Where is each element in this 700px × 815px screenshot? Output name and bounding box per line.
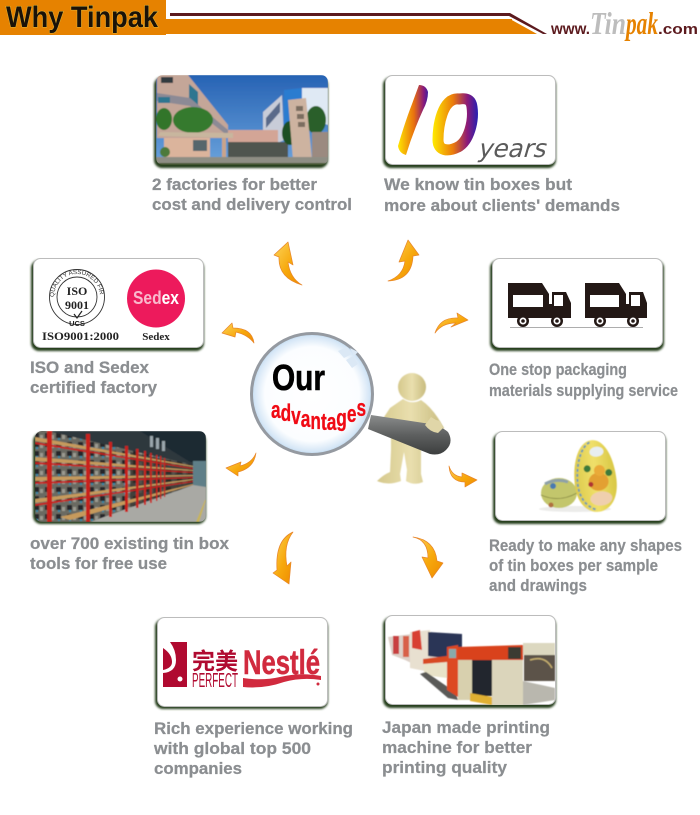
website logo — [550, 5, 698, 41]
figure holding magnifier — [252, 334, 451, 484]
caption: of tin boxes per sample — [489, 556, 658, 575]
icon: hand — [425, 417, 443, 433]
photo: printing machine — [388, 630, 555, 705]
icon: ISO 9001 seal: 9001 — [65, 298, 89, 312]
icon: delivery trucks — [508, 283, 647, 328]
icon: figure — [377, 373, 444, 484]
caption — [152, 175, 352, 214]
caption: and drawings — [489, 576, 587, 595]
website logo: Tin — [590, 5, 626, 41]
icon: magnifier handle — [368, 415, 451, 454]
icon: Perfect logo: 完美 — [192, 648, 238, 674]
arrow: to ISO — [222, 323, 254, 343]
caption — [153, 719, 353, 778]
caption: over 700 existing tin box — [30, 534, 230, 553]
icon: ISO 9001 seal: ISO — [67, 284, 87, 298]
caption: tools for free use — [30, 554, 167, 573]
arrow: to factories — [274, 242, 302, 285]
caption: One stop packaging — [489, 360, 627, 379]
icon: Nestle logo — [243, 644, 321, 687]
icon: ISO 9001 seal — [42, 269, 119, 343]
icon: Perfect logo — [163, 642, 238, 692]
caption: printing quality — [382, 758, 508, 777]
photo: factory buildings — [156, 75, 328, 165]
caption — [489, 536, 682, 595]
arrow: to clients — [273, 532, 293, 584]
caption: Japan made printing — [382, 718, 550, 737]
panel: trucks — [489, 258, 678, 400]
caption: certified factory — [30, 378, 158, 397]
magnifier lens — [252, 334, 372, 454]
caption — [384, 175, 620, 215]
caption: more about clients' demands — [384, 196, 620, 215]
arrow: to egg tins — [449, 466, 477, 487]
website logo: www. — [550, 21, 590, 38]
panel: tools warehouse — [30, 428, 230, 573]
text: Our: Our — [272, 357, 325, 398]
caption — [489, 360, 678, 400]
website logo: pak — [624, 5, 658, 41]
caption: machine for better — [382, 738, 532, 757]
icon: ISO 9001 seal: UCS — [69, 319, 85, 328]
caption: 2 factories for better — [152, 175, 317, 194]
panel: global clients — [153, 618, 353, 778]
icon: Nestle logo: Nestlé — [243, 644, 320, 682]
arrow: to printing — [413, 537, 443, 578]
caption: companies — [154, 759, 242, 778]
heading: Why Tinpak: Why Tinpak — [6, 1, 158, 34]
caption: Rich experience working — [154, 719, 353, 738]
icon: 10 years logo — [398, 85, 551, 164]
caption — [382, 718, 550, 777]
icon: 10 years logo: years — [475, 134, 551, 164]
panel: 10 years — [383, 76, 620, 215]
caption: We know tin boxes but — [384, 175, 572, 194]
panel: global clients: PERFECT — [192, 670, 238, 692]
photo: egg shaped tins — [539, 438, 620, 514]
website logo: .com — [658, 21, 698, 38]
panel: printing machine — [382, 616, 556, 777]
panel: factories — [152, 75, 352, 214]
icon: ISO 9001 seal: ISO9001:2000 — [42, 329, 119, 343]
caption — [30, 534, 230, 573]
panel: tin egg boxes — [489, 432, 682, 595]
photo: tool racks — [35, 428, 206, 522]
caption: ISO and Sedex — [30, 358, 150, 377]
panel: ISO and Sedex — [29, 258, 206, 397]
caption: with global top 500 — [153, 739, 311, 758]
text: advantages: advantages — [271, 395, 366, 436]
icon: Sedex logo: Sedex — [133, 288, 179, 308]
arrow: to 10 years — [388, 240, 419, 281]
header banner — [0, 0, 547, 35]
caption: Ready to make any shapes — [489, 536, 682, 555]
caption: cost and delivery control — [152, 195, 352, 214]
icon: Sedex logo: Sedex — [142, 331, 170, 343]
arrow: to tools — [226, 453, 256, 476]
caption — [30, 358, 158, 397]
icon: Sedex logo — [127, 270, 185, 343]
arrow: to trucks — [435, 313, 468, 333]
